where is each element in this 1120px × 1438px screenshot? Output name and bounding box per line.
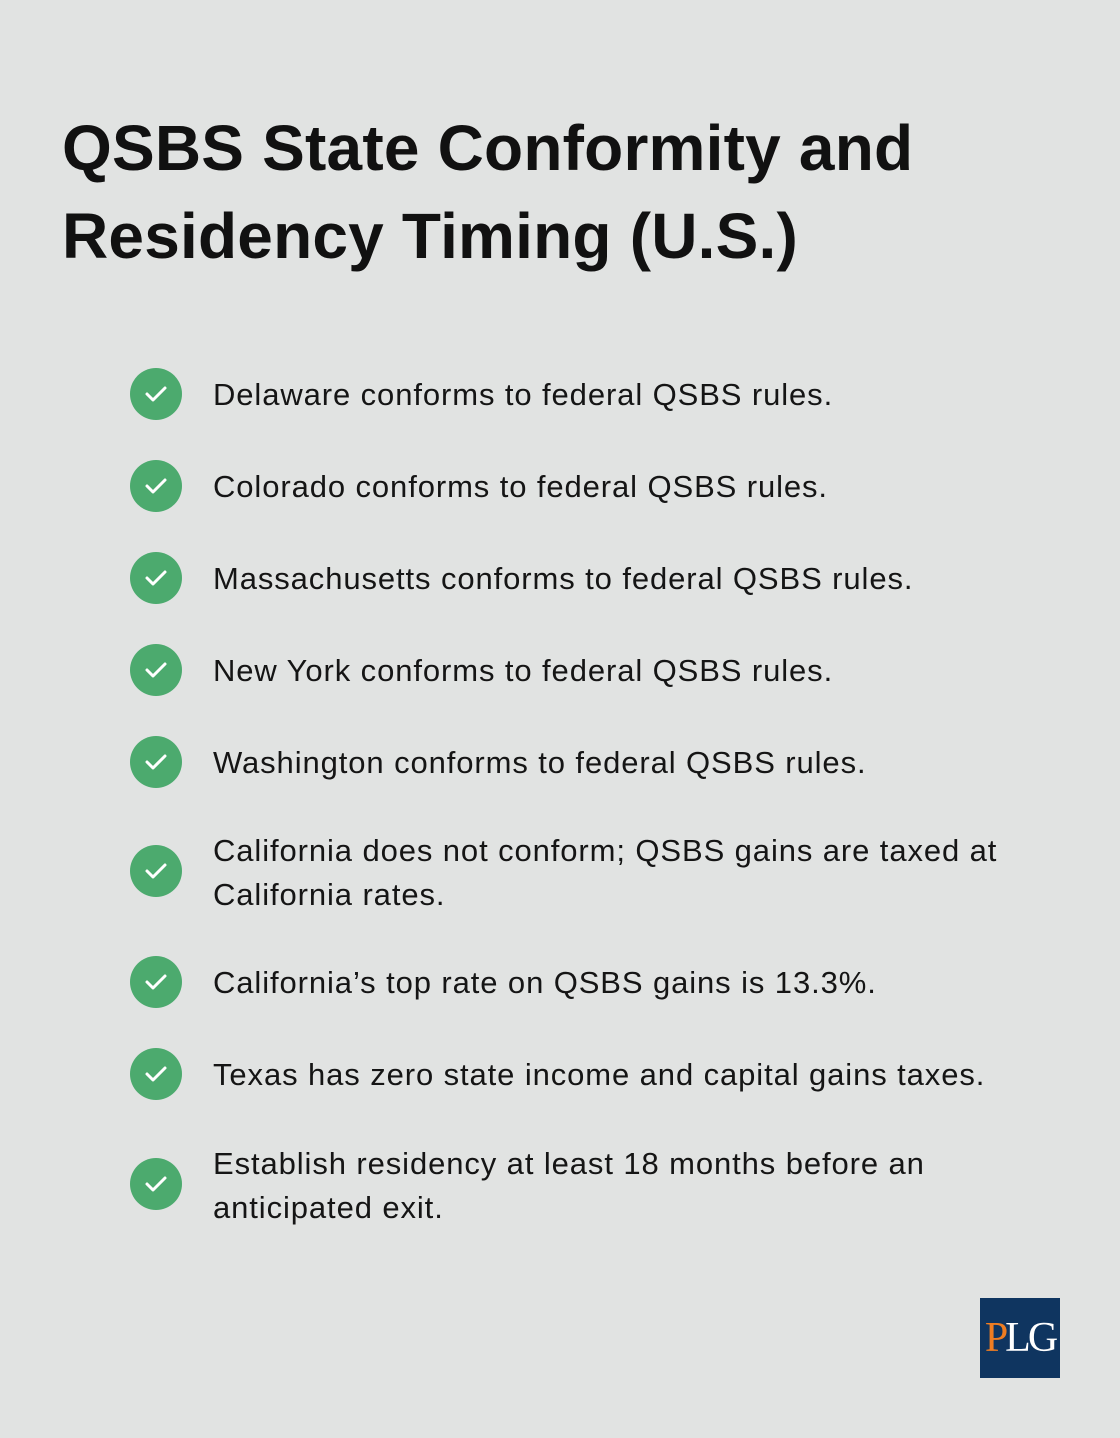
title: [62, 112, 913, 272]
item: Massachusetts: Massachusetts conforms to federal QSBS rules.: [213, 561, 913, 596]
logo: PLG: PLG: [985, 1315, 1055, 1361]
item: New York: New York conforms to federal QSBS rules.: [213, 653, 833, 688]
item: Washington: [130, 736, 866, 788]
item: Texas: [130, 1048, 985, 1100]
item: Colorado: Colorado conforms to federal QSBS rules.: [213, 469, 828, 504]
item: Texas: Texas has zero state income and capital gains taxes.: [213, 1057, 985, 1092]
item: Delaware: [130, 368, 833, 420]
item: New York: [130, 644, 833, 696]
item: Washington: Washington conforms to federal QSBS rules.: [213, 745, 866, 780]
item: California: California does not conform; QSBS gains are taxed at: [213, 833, 997, 868]
item: Massachusetts: [130, 552, 913, 604]
item: residency: [130, 1146, 925, 1225]
item: California rate: [130, 956, 877, 1008]
item: California rate: California’s top rate on QSBS gains is 13.3%.: [213, 965, 877, 1000]
title: QSBS State Conformity and: [62, 112, 913, 184]
item: Delaware: Delaware conforms to federal QSBS rules.: [213, 377, 833, 412]
item: Colorado: [130, 460, 828, 512]
item: residency: anticipated exit.: [213, 1190, 444, 1225]
item: residency: Establish residency at least 18 months before an: [213, 1146, 925, 1181]
logo: PLG: [980, 1298, 1060, 1378]
item: California: California rates.: [213, 877, 445, 912]
item: California: [130, 833, 997, 912]
title: Residency Timing (U.S.): [62, 200, 798, 272]
